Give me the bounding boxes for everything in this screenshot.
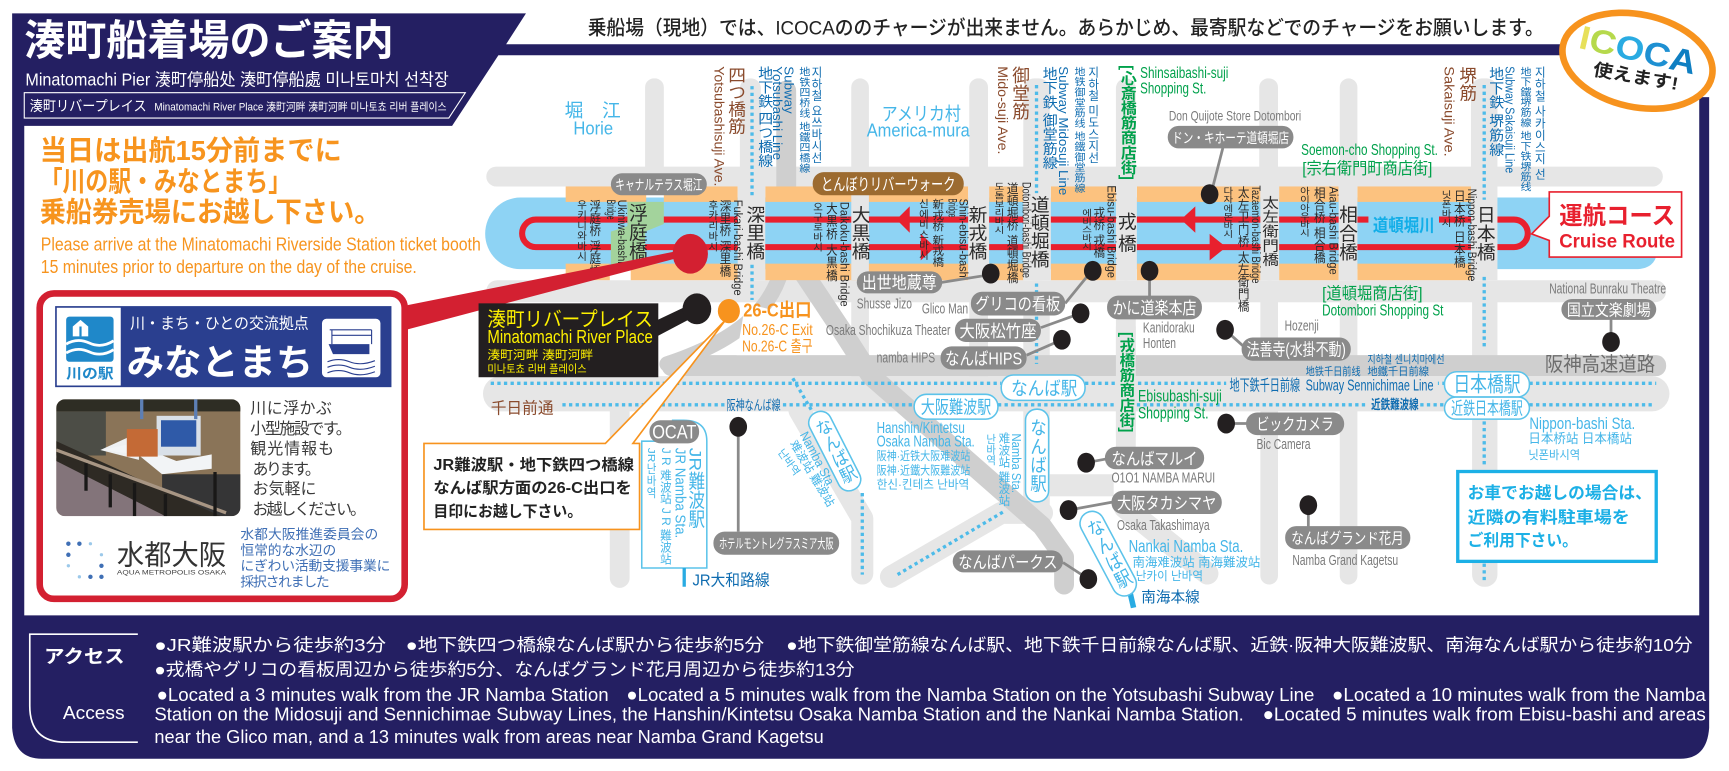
text: floating facility description: 小型施設です。 [250, 420, 352, 438]
bridge: Fukari: 후카리바시 [707, 200, 718, 252]
station: JR Namba: JR大和路線 [692, 572, 770, 590]
bridge: Aiau: Aiau-bashi Bridge [1327, 186, 1339, 275]
river name: 道頓堀川 [1373, 216, 1435, 236]
bridge: Dotonbori: 도톰보리바시 [993, 182, 1004, 234]
callout: parking by car: ご利用下さい。 [1468, 530, 1578, 550]
bridge: Daikoku: 오구로바시 [812, 202, 823, 252]
subway dotted lines [491, 85, 1656, 583]
station: Osaka Namba: 阪神·近铁大阪难波站 [877, 448, 970, 463]
bridge: Ukiniwa: 浮庭橋 [627, 203, 648, 261]
station: Nippombashi: 닛폰바시역 [1528, 448, 1580, 462]
shopping street: Soemon-cho [1301, 142, 1438, 178]
bridge: Nippon [1440, 189, 1496, 281]
station: Namba Yotsubashi: なんば駅 [810, 415, 859, 487]
notice: ICOCA charge: 乗船場（現地）では、ICOCAののチャージが出来ません。あらかじめ、最寄駅などでのチャージをお願いします。 [588, 17, 1544, 39]
panel: access [30, 634, 1706, 747]
text: English access details: ●Located a 10 minutes walk from the Namba [1332, 684, 1706, 705]
label: Glico sign: グリコの看板 [975, 295, 1060, 314]
street label: Yotsubashi: 地铁四桥线 地鐵四橋線 [798, 66, 810, 173]
Sennichimae line labels: 地下鉄千日前線 [1229, 376, 1300, 394]
station: Osaka Namba: 大阪難波駅 [921, 398, 991, 418]
shopping street: Dotombori: Dotombori Shopping St [1322, 302, 1444, 319]
cruise route line [522, 206, 1528, 260]
callout: 26-C exit directions: JR難波駅・地下鉄四つ橋線 [433, 455, 635, 474]
Sennichimae line labels [727, 352, 1445, 413]
station: JR Namba: JR난바역 [645, 448, 656, 499]
bridge: Tazaemon: 다자에몬바시 [1222, 186, 1233, 238]
label: namba HIPS: namba HIPS [877, 350, 935, 366]
label: Tonbori River Walk: とんぼりリバーウォーク [821, 175, 955, 194]
station: Namba Yotsubashi: Namba Sta. [797, 429, 839, 490]
area label: America-mura: アメリカ村 [882, 103, 961, 124]
street label: Sakaisuji: Sakaisuji Ave. [1441, 66, 1456, 157]
bridge: Nippon: 닛폰바시 [1440, 190, 1451, 227]
shopping street: Shinsaibashi [1118, 65, 1228, 180]
text: English access details: ●Located a 3 minutes walk from the JR Namba Station [157, 684, 609, 705]
label: namba HIPS [877, 330, 1071, 370]
text: English access details: ●Located a 5 minutes walk from the Namba Station on the Yotsubashi Subway Line [626, 684, 1314, 705]
station: Osaka Namba: Hanshin/Kintetsu [877, 420, 965, 437]
label: Osaka Shochikuza: Osaka Shochikuza Theater [826, 323, 951, 339]
label: Kanidoraku: かに道楽本店 [1113, 299, 1196, 318]
station: Nippombashi: 日本桥站 日本橋站 [1528, 431, 1632, 446]
text: English access details: Station on the Midosuji and Sennichimae Subway Lines, the Hanshin/Kintetsu Osaka Namba Station and the Nankai Namba Station. [154, 704, 1244, 725]
label: Namba Marui [1077, 447, 1215, 487]
label: Namba Grand Kagetsu: なんばグランド花月 [1291, 530, 1404, 548]
label: Hotel Monterey: ホテルモントレグラスミア大阪 [719, 537, 834, 552]
label: Hozenji [1216, 318, 1351, 361]
bridge: Aiau: 相合橋 [1337, 205, 1358, 262]
bridge: Shin-ebisu [917, 199, 987, 280]
street label: Yotsubashi: 지하철 요쓰바시선 [810, 66, 822, 163]
station: Osaka Namba: 阪神·近鐵大阪難波站 [877, 462, 970, 477]
title block: Minatomachi Pier 湊町停船处 湊町停船處 미나토마치 선착장 [25, 71, 449, 90]
text: promotion committee note: 水都大阪推進委員会の [240, 527, 378, 542]
label: Osaka Takashimaya [1060, 491, 1222, 534]
text: floating facility description: 川に浮かぶ [250, 400, 332, 418]
logo: Aqua Metropolis Osaka: 水都大阪 [117, 540, 226, 571]
heading: boarding instruction [40, 135, 380, 228]
bridge: Dotonbori: Dotombori-bashi Bridge [1019, 182, 1031, 278]
access tab [30, 634, 138, 742]
text: English instruction [41, 233, 481, 277]
bridge: Shin-ebisu: Shin-ebisu-bashi [957, 199, 969, 280]
station: Namba Midosuji: なんば駅 [1028, 418, 1047, 493]
red connector from pier to panel [406, 234, 708, 330]
bridge: Nippon: 日本橋 [1475, 205, 1496, 262]
street label: Yotsubashi: Yotsubashisuji Ave. [711, 66, 726, 186]
station: Namba Yotsubashi: 难波站 難波站 [787, 438, 838, 510]
bridge: Ukiniwa [576, 200, 648, 278]
street label: Yotsubashi: 四つ橋筋 [727, 66, 747, 135]
label: Kanidoraku: Honten [1143, 336, 1176, 352]
bridge: Ebisu: 戎桥 戎橋 [1092, 206, 1105, 259]
station: JR Namba: OCAT [652, 421, 696, 443]
title block [24, 17, 465, 118]
station: Namba Midosuji: 난바역 [985, 433, 996, 466]
label: Minatomachi River Place [479, 293, 711, 377]
text: Japanese access details: ●地下鉄御堂筋線なんば駅、地下鉄千日前線なんば駅、近鉄·阪神大阪難波駅、南海なんば駅から徒歩約10分 [786, 635, 1693, 655]
label: National Bunraku Theatre: 国立文楽劇場 [1567, 301, 1651, 319]
bridge: Ebisu: 戎橋 [1116, 212, 1137, 253]
text: floating facility description: お越しください。 [253, 501, 366, 519]
Sennichimae line labels: 近鉄難波線 [1371, 396, 1419, 412]
label: Osaka Takashimaya: Osaka Takashimaya [1117, 518, 1210, 534]
station: Namba Midosuji [985, 375, 1085, 507]
label: Namba Parks: なんばパークス [958, 553, 1057, 572]
label: National Bunraku Theatre: National Bunraku Theatre [1549, 281, 1666, 297]
bridge: Tazaemon: 太左衛門橋 [1260, 195, 1279, 268]
Sennichimae line labels: 阪神なんば線 [727, 398, 781, 413]
bridge: Tazaemon: Tazaemon-bashi Bridge [1249, 185, 1261, 284]
street label: Midosuji [995, 66, 1099, 195]
street label: Yotsubashi [711, 66, 822, 186]
station: Namba Yotsubashi [775, 408, 865, 510]
photo: floating facility [56, 399, 240, 516]
text: Japanese access details: ●地下鉄四つ橋線なんば駅から徒歩約5分 [406, 635, 765, 655]
label: Minatomachi River Place: 미나토쵸 리버 플레이스 [487, 362, 587, 375]
station: Nankai Namba: 南海难波站 南海難波站 [1132, 554, 1261, 569]
bridge: Ukiniwa: 우키니와바시 [576, 200, 587, 261]
callout: 26-C exit directions: なんば駅方面の26-C出口を [433, 478, 632, 497]
banner: 川・まち・ひとの交流拠点 [130, 315, 309, 333]
callout: 26-C exit directions: 目印にお越し下さい。 [433, 503, 582, 521]
callout: 26-C exit directions [424, 320, 726, 529]
label: Canal Terrace Horie: キャナルテラス堀江 [615, 177, 702, 194]
label: Namba Marui: なんばマルイ [1112, 449, 1198, 468]
station: JR Namba: JR難波駅 [686, 448, 705, 528]
label strip: River Place: 湊町リバープレイス [30, 98, 147, 115]
Sennichimae line labels: 지하철 센니치마에선 [1367, 352, 1445, 366]
icon: boat [322, 319, 380, 377]
text: English instruction: Please arrive at the Minatomachi Riverside Station ticket booth [41, 233, 481, 254]
label: namba HIPS: なんばHIPS [945, 350, 1022, 369]
bridge: Ebisu: Ebisu-bashi Bridge [1104, 185, 1116, 278]
station: Nippombashi: Nippon-bashi Sta. [1529, 414, 1635, 433]
Hanshin expressway [662, 91, 1666, 585]
bridge: Nippon: Nippon-bashi Bridge [1465, 189, 1477, 281]
bridge: Dotonbori: 道頓堀橋 [1029, 195, 1050, 269]
station: Nippombashi: 日本橋駅 [1453, 374, 1521, 397]
text: English instruction: 15 minutes prior to departure on the day of the cruise. [41, 256, 417, 277]
bridge: Shin-ebisu: 新戎橋 [966, 205, 987, 261]
label strip: River Place: Minatomachi River Place 湊町河畔 湊町河畔 미나토쵸 리버 플레이스 [154, 99, 447, 113]
bridge: Dotonbori [993, 181, 1050, 284]
street label: Sakaisuji: Subway Sakaisuji Line [1503, 66, 1518, 173]
bridge: Shin-ebisu: Bridge [946, 199, 958, 217]
street label: Midosuji: Mido-suji Ave. [995, 66, 1010, 154]
label: Shusse Jizo: 出世地蔵尊 [862, 273, 937, 292]
street label: Midosuji: 地下鉄 御堂筋線 [1041, 66, 1057, 170]
bridge: Ukiniwa: Bridge [604, 200, 616, 220]
road label: Sennichimae-dori: 千日前通 [491, 400, 554, 418]
heading: boarding instruction: 「川の駅・みなとまち」 [40, 166, 291, 197]
bridge: Shin-ebisu: 신에비스바시 [917, 199, 928, 260]
station: Namba Midosuji: 难波站 難波站 [997, 432, 1010, 507]
station: Namba Yotsubashi: 난바역 [775, 447, 802, 478]
icon: river station logo [66, 317, 114, 382]
street label: Sakaisuji: 地下鉄 堺筋線 [1487, 66, 1504, 157]
marker: 26-C exit: No.26-C 출구 [742, 337, 813, 355]
label: Bic Camera: Bic Camera [1257, 437, 1311, 453]
heading: boarding instruction: 乗船券売場にお越し下さい。 [40, 197, 380, 228]
bridge: Tazaemon [1222, 185, 1279, 313]
access tab: Access [63, 702, 125, 723]
bridge: Daikoku: 大黒桥 大黒橋 [825, 201, 838, 282]
station: JR Namba: J R 难波站 J R 難波站 [659, 448, 672, 565]
shopping street: Shinsaibashi: [心斎橋筋商店街] [1118, 65, 1137, 180]
label: Shusse Jizo: Shusse Jizo [857, 296, 912, 312]
station: Nippombashi [1445, 372, 1635, 462]
label: Kanidoraku: Kanidoraku [1143, 321, 1195, 337]
badge: ICOCA: 使えます! [1592, 59, 1680, 94]
label: Osaka Takashimaya: 大阪タカシマヤ [1117, 494, 1216, 513]
expressway name: 阪神高速道路 [1545, 354, 1655, 376]
bridge: Fukari: 深里桥 深里橋 [718, 199, 731, 278]
text: promotion committee note: 恒常的な水辺の [240, 543, 336, 558]
shopping street: Soemon-cho: Soemon-cho Shopping St. [1301, 142, 1438, 159]
Sennichimae line labels: Subway Sennichimae Line [1306, 377, 1433, 394]
station: JR Namba: JR Namba Sta. [671, 448, 687, 538]
text: floating facility description: あります。 [253, 460, 321, 478]
callout: parking by car: 近隣の有料駐車場を [1468, 507, 1630, 527]
badge: ICOCA [1553, 0, 1722, 122]
label: Glico sign [922, 261, 1102, 317]
road network [483, 78, 1669, 588]
logo: Aqua Metropolis Osaka: AQUA METROPOLIS OSAKA [117, 570, 227, 577]
bridge: Fukari [707, 199, 765, 296]
area label: Horie: Horie [573, 118, 613, 139]
label: Don Quijote: Don Quijote Store Dotombori [1169, 108, 1301, 123]
street label: Yotsubashi: Subway [781, 66, 796, 114]
street label: Yotsubashi: Yotsubashi Line [770, 66, 785, 160]
marker: 26-C exit: 26-C出口 [743, 300, 812, 321]
label: Namba Parks [953, 550, 1097, 589]
text: English access details [154, 684, 1706, 747]
station: Nankai Namba [1076, 507, 1261, 608]
street label: Midosuji: 御堂筋 [1011, 66, 1031, 121]
label: Shusse Jizo [857, 264, 1000, 312]
shopping street: Shinsaibashi: Shinsaibashi-suji [1140, 65, 1228, 82]
station: Osaka Namba [877, 394, 998, 492]
area label: America-mura [867, 103, 970, 140]
label: Namba Grand Kagetsu: Namba Grand Kagetsu [1292, 553, 1398, 569]
shopping street: Ebisubashi-suji: [戎橋筋商店街] [1117, 332, 1135, 432]
street label: Sakaisuji [1441, 66, 1546, 192]
marker: 26-C exit [718, 299, 814, 355]
shopping street: Ebisubashi-suji [1116, 327, 1222, 437]
icon: river station logo: 川の駅 [66, 365, 114, 382]
label: Namba Grand Kagetsu [1285, 495, 1410, 569]
shopping street: Shinsaibashi: Shopping St. [1140, 80, 1206, 97]
bridge: Ukiniwa: Ukiniwa-bashi [615, 200, 627, 264]
label: Minatomachi River Place: 湊町リバープレイス [487, 309, 653, 331]
bridge: Shin-ebisu: 新戎桥 新戎橋 [931, 199, 944, 268]
panel: Kawa no Eki Minatomachi [40, 293, 405, 599]
text: promotion committee note: 採択されました [240, 575, 330, 590]
text: promotion committee note: にぎわい活動支援事業に [240, 559, 390, 574]
bridge: Daikoku [812, 201, 871, 307]
bridge: Aiau: 아이아우바시 [1298, 186, 1309, 237]
bridge: Aiau: 相合桥 相合橋 [1313, 186, 1326, 264]
shopping street: Soemon-cho: [宗右衛門町商店街] [1302, 159, 1432, 178]
label: Don Quijote: ドン・キホーテ道頓堀店 [1172, 130, 1289, 147]
text: English access details: near the Glico man, and a 13 minutes walk from areas near Namba Grand Kagetsu [154, 726, 824, 747]
bridge: Fukari: 深里橋 [744, 205, 765, 261]
station: Namba Midosuji: Namba Sta. [1009, 433, 1024, 493]
station: Nippombashi: 近鉄日本橋駅 [1451, 399, 1523, 419]
text: floating facility description: お気軽に [253, 480, 316, 498]
area label: America-mura: America-mura [867, 119, 970, 140]
area label: Horie [565, 100, 621, 139]
callout: parking by car [1458, 472, 1656, 561]
label: Hotel Monterey [713, 417, 839, 555]
station: Nankai Namba: 南海本線 [1141, 589, 1200, 606]
bridge: Daikoku: Daikoku-bashi Bridge [838, 202, 850, 307]
area label: Horie: 堀 江 [565, 100, 621, 121]
label: Kanidoraku [1107, 261, 1202, 352]
text: Japanese access details: ●JR難波駅から徒歩約3分 [154, 635, 386, 655]
bridge: Dotonbori: 道頓堀桥 道頓堀橋 [1006, 181, 1018, 284]
arrows: cruise direction [896, 206, 1226, 260]
text: English access details: ●Located 5 minutes walk from Ebisu-bashi and areas [1263, 704, 1706, 725]
bridge: Nippon: 日本桥 日本橋 [1453, 190, 1466, 269]
label: Minatomachi River Place: Minatomachi River Place [487, 327, 653, 347]
Ukiniwa park [611, 202, 664, 268]
bridge: Aiau [1298, 186, 1358, 275]
banner: みなとまち [127, 342, 313, 383]
label: Bic Camera [1217, 413, 1344, 453]
callout: parking by car: お車でお越しの場合は、 [1468, 484, 1652, 503]
callout: Cruise Route: 運航コース [1559, 203, 1675, 230]
label: Don Quijote [1168, 108, 1301, 204]
access tab: アクセス [44, 646, 125, 667]
street label: Midosuji: 지하철 미도스지선 [1087, 66, 1099, 163]
label: Glico sign: Glico Man [922, 301, 968, 317]
label: National Bunraku Theatre [1549, 281, 1666, 352]
street label: Sakaisuji: 堺筋 [1458, 66, 1478, 102]
shopping street: Ebisubashi-suji: Shopping St. [1138, 404, 1209, 423]
bridge: Tazaemon: 太左卫门桥 太左衛門橋 [1237, 186, 1250, 313]
street label: Midosuji: Subway Midosuji Line [1056, 66, 1071, 195]
text: Japanese access details [154, 635, 1693, 680]
station: Nankai Namba: Nankai Namba Sta. [1129, 537, 1243, 556]
label: Tonbori River Walk [813, 172, 964, 195]
station: Nankai Namba: 난카이 난바역 [1136, 569, 1203, 583]
label: Namba Marui: O1O1 NAMBA MARUI [1112, 471, 1215, 487]
label: Osaka Shochikuza [826, 303, 1089, 342]
text: floating facility description: 観光情報も [250, 440, 334, 458]
bridge decks [738, 186, 1497, 280]
title block: 湊町船着場のご案内 [24, 17, 394, 64]
bridge: Ebisu: 에비스바시 [1081, 209, 1092, 250]
station: Nankai Namba: なんば駅 [1081, 515, 1135, 592]
station: Osaka Namba: 한신·킨테츠 난바역 [877, 478, 969, 492]
label: Canal Terrace Horie [611, 173, 707, 195]
badge: ICOCA: ICOCA [1576, 19, 1700, 82]
shopping street: Dotombori: [道頓堀商店街] [1322, 284, 1422, 303]
street label: Yotsubashi: 地下鉄 四つ橋線 [756, 66, 773, 168]
logo: Aqua Metropolis Osaka [66, 540, 227, 579]
Sennichimae line labels: 地铁千日前线 [1306, 364, 1361, 378]
shopping street: Ebisubashi-suji: Ebisubashi-suji [1138, 386, 1222, 405]
station: JR Namba [642, 420, 770, 590]
callout: Cruise Route: Cruise Route [1559, 232, 1675, 253]
river Dotonbori [485, 197, 1657, 269]
label: Hozenji: 法善寺(水掛不動) [1247, 341, 1346, 360]
station: Osaka Namba: Osaka Namba Sta. [877, 434, 975, 451]
street label: Sakaisuji: 地下鐵堺筋線 地下铁堺筋线 [1519, 66, 1532, 192]
text: Japanese access details: ●戎橋やグリコの看板周辺から徒歩約5分、なんばグランド花月周辺から徒歩約13分 [154, 660, 855, 680]
bridge: Fukari: Fukari-bashi Bridge [731, 200, 743, 296]
label: Bic Camera: ビックカメラ [1257, 415, 1334, 434]
street label: Sakaisuji: 지하철 사카이스지 선 [1533, 66, 1546, 180]
bridge: Ebisu [1081, 185, 1137, 278]
street label: Midosuji: 地铁御堂筋线 地鐵御堂筋線 [1073, 66, 1085, 193]
text: floating facility description [250, 400, 366, 519]
shopping street: Dotombori [1322, 284, 1444, 319]
label: Minatomachi River Place: 湊町河畔 湊町河畔 [487, 348, 593, 362]
Sennichimae line labels: 地鐵千日前線 [1367, 364, 1429, 378]
callout: Cruise Route [1532, 192, 1682, 257]
bridge: Daikoku: 大黒橋 [850, 205, 871, 261]
text: promotion committee note [240, 527, 390, 590]
label strip: River Place [24, 93, 465, 118]
heading: boarding instruction: 当日は出航15分前までに [40, 135, 342, 166]
bridge: Ukiniwa: 浮庭桥 浮庭橋 [588, 200, 601, 278]
river embankments [566, 186, 1471, 280]
label: Hozenji: Hozenji [1285, 318, 1319, 334]
marker: 26-C exit: No.26-C Exit [742, 322, 813, 339]
label: Osaka Shochikuza: 大阪松竹座 [959, 322, 1037, 341]
banner [55, 306, 391, 387]
station: Namba Midosuji: なんば駅 [1011, 378, 1078, 399]
